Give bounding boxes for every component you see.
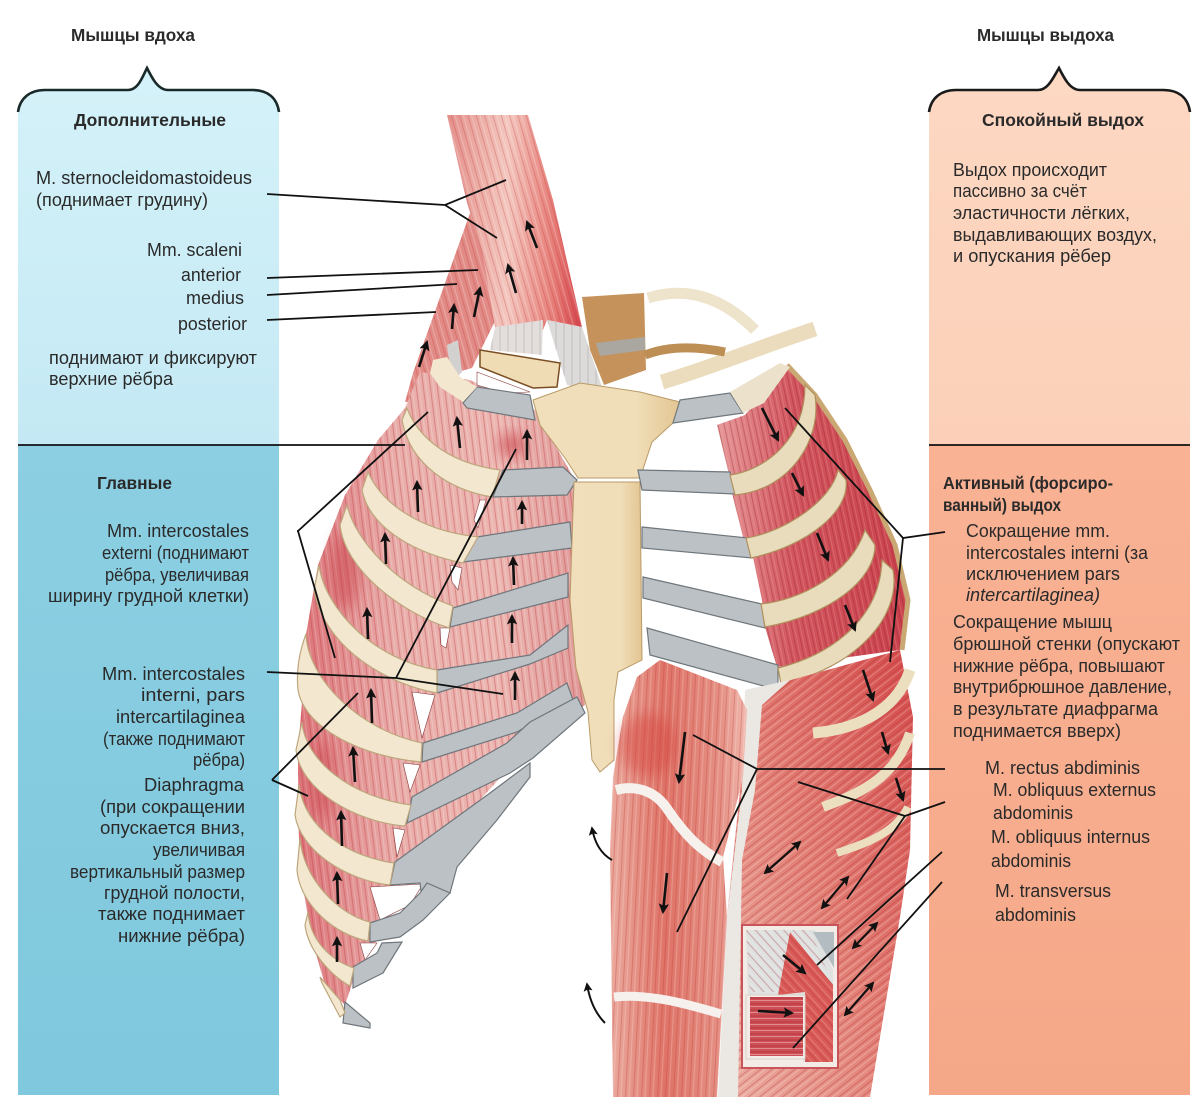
text: active exhalation: M. transversus	[995, 881, 1111, 901]
text: active exhalation: M. rectus abdiminis	[985, 758, 1140, 778]
text: active exhalation: в результате диафрагма	[953, 699, 1159, 719]
text: main muscles: вертикальный размер	[70, 862, 245, 882]
illustration: upper airway column	[582, 293, 646, 385]
text: active exhalation: Активный (форсиро-	[943, 473, 1113, 493]
text: main muscles: Главные	[97, 473, 172, 493]
text: main muscles: грудной полости,	[104, 883, 245, 903]
text: main muscles: Diaphragma	[144, 775, 245, 795]
heading: muscles of exhalation: Мышцы выдоха	[977, 25, 1114, 45]
text: active exhalation: внутрибрюшное давление,	[953, 677, 1172, 697]
illustration: left rib cage muscles	[298, 372, 585, 1005]
lower ribs	[813, 670, 910, 733]
text: active exhalation: intercartilaginea)	[966, 585, 1100, 605]
text: accessory muscles	[36, 110, 257, 389]
transversus abdominis window	[746, 995, 805, 1059]
text: main muscles: intercartilaginea	[116, 707, 246, 727]
panel: quiet exhalation	[929, 68, 1190, 445]
illustration: neck muscles	[405, 115, 604, 402]
text: accessory muscles: M. sternocleidomastoideus	[36, 168, 252, 188]
clavicle	[662, 329, 815, 382]
text: main muscles: (при сокращении	[100, 797, 245, 817]
text: accessory muscles: medius	[186, 288, 244, 308]
text: active exhalation	[943, 473, 1180, 925]
text: main muscles: ширину грудной клетки)	[48, 586, 249, 606]
sternum body and xiphoid	[570, 482, 642, 772]
illustration: sternum	[533, 383, 680, 772]
illustration: external oblique muscle	[718, 650, 913, 1097]
illustration: rectus abdominis	[610, 660, 747, 1097]
text: main muscles: рёбра, увеличивая	[105, 565, 249, 585]
heading: muscles of inhalation: Мышцы вдоха	[71, 25, 195, 45]
panel: main inspiratory muscles	[18, 445, 279, 1095]
arrows: muscle action on inspiration	[337, 222, 537, 962]
scalene muscles	[405, 213, 497, 402]
white gaps between ribs	[360, 372, 530, 960]
text: active exhalation: M. obliquus externus	[993, 780, 1156, 800]
text: main muscles: рёбра)	[193, 750, 245, 770]
text: main muscles: (также поднимают	[103, 729, 245, 749]
first rib and clavicle stump	[430, 350, 560, 402]
manubrium	[533, 383, 680, 478]
text: active exhalation: M. obliquus internus	[991, 827, 1150, 847]
illustration: left cartilage	[343, 387, 585, 1028]
text: active exhalation: Сокращение мышц	[953, 612, 1112, 632]
text: quiet exhalation: Спокойный выдох	[982, 110, 1144, 130]
text: main muscles: Mm. intercostales	[102, 664, 245, 684]
first right rib arc	[648, 293, 755, 330]
text: main muscles: externi (поднимают	[102, 543, 249, 563]
illustration: right intercostal muscles	[717, 365, 908, 667]
text: active exhalation: ванный) выдох	[943, 495, 1061, 515]
panel: accessory inspiratory muscles	[18, 68, 279, 445]
arrows: muscle action on expiration	[587, 408, 903, 1023]
illustration: left ribs	[295, 350, 560, 1017]
text: active exhalation: поднимается вверх)	[953, 721, 1121, 741]
text: active exhalation: Сокращение mm.	[966, 521, 1110, 541]
text: quiet exhalation	[953, 110, 1157, 266]
leader lines: right side	[677, 408, 1190, 1048]
text: accessory muscles: Дополнительные	[74, 110, 226, 130]
text: main muscles	[48, 473, 249, 946]
text: active exhalation: intercostales interni (за	[966, 543, 1149, 563]
text: accessory muscles: posterior	[178, 314, 247, 334]
text: accessory muscles: Mm. scaleni	[147, 240, 242, 260]
text: quiet exhalation: выдавливающих воздух,	[953, 225, 1157, 245]
panel: active exhalation	[929, 445, 1190, 1095]
illustration: right cartilage	[638, 393, 778, 690]
aponeurosis strip	[718, 680, 790, 1097]
text: active exhalation: abdominis	[993, 803, 1073, 823]
text: main muscles: Mm. intercostales	[107, 521, 249, 541]
text: main muscles: опускается вниз,	[100, 818, 245, 838]
text: active exhalation: abdominis	[991, 851, 1071, 871]
text: accessory muscles: верхние рёбра	[49, 369, 174, 389]
text: active exhalation: исключением pars	[966, 564, 1120, 584]
text: quiet exhalation: и опускания рёбер	[953, 246, 1111, 266]
text: quiet exhalation: Выдох происходит	[953, 160, 1107, 180]
illustration: internal oblique window	[742, 925, 838, 1068]
text: accessory muscles: поднимают и фиксируют	[49, 348, 257, 368]
illustration: right ribs and clavicle	[645, 293, 894, 684]
text: active exhalation: брюшной стенки (опускают	[953, 634, 1180, 654]
text: active exhalation: abdominis	[995, 905, 1076, 925]
text: quiet exhalation: эластичности лёгких,	[953, 203, 1130, 223]
sternocleidomastoid muscle	[447, 115, 604, 393]
text: active exhalation: нижние рёбра, повышают	[953, 656, 1165, 676]
text: quiet exhalation: пассивно за счёт	[953, 181, 1087, 201]
leader lines: left side	[18, 180, 516, 796]
text: accessory muscles: anterior	[181, 265, 241, 285]
text: main muscles: нижние рёбра)	[118, 926, 245, 946]
text: main muscles: увеличивая	[153, 840, 245, 860]
text: accessory muscles: (поднимает грудину)	[36, 190, 208, 210]
text: main muscles: interni, pars	[141, 685, 245, 705]
text: main muscles: также поднимает	[98, 904, 245, 924]
tendinous intersections	[616, 788, 722, 862]
